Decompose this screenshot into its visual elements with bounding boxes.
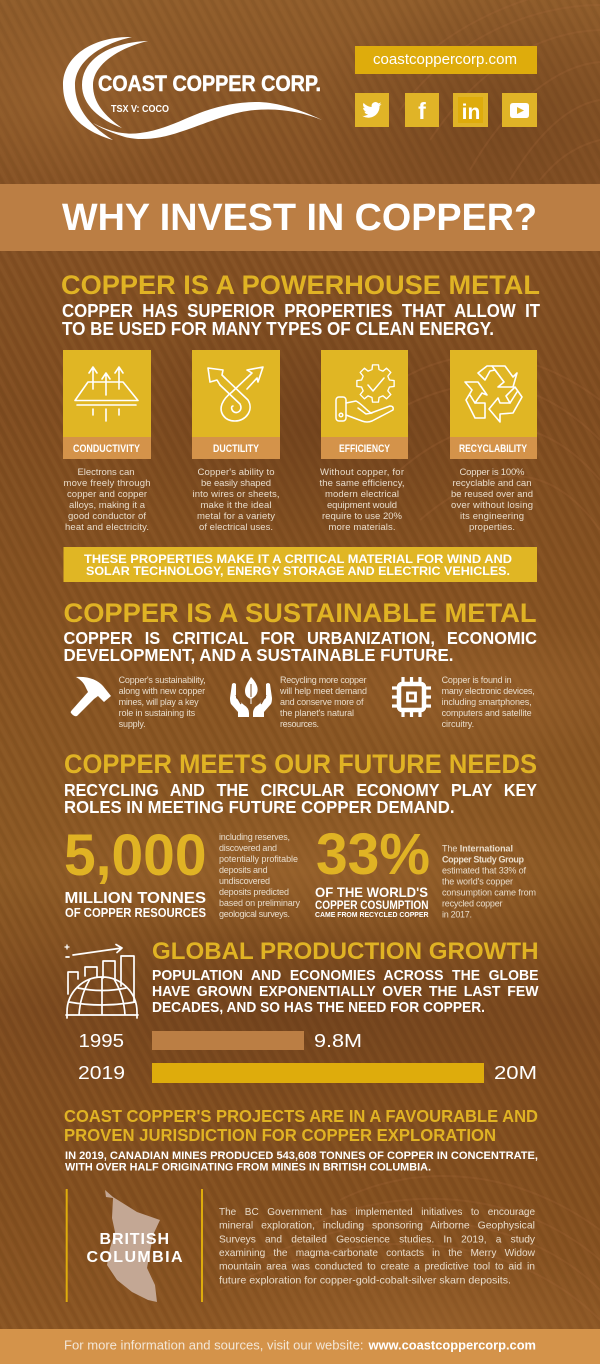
- text: recycling note: will help meet demand: [279, 686, 367, 696]
- map label: BRITISH: [100, 1231, 169, 1248]
- icon: facebook: f: [418, 98, 426, 124]
- text: resources note: based on preliminary: [219, 898, 300, 908]
- text: recycled note: recycled copper: [442, 898, 502, 908]
- text: recycled note: the world's copper: [442, 876, 513, 886]
- text: hammer note: Copper's sustainability,: [119, 675, 206, 685]
- logo crescents and swoosh: [63, 37, 322, 140]
- map label: [86, 1231, 183, 1266]
- text: recycled note: Copper Study Group: [442, 854, 524, 864]
- icon: global growth: [65, 944, 138, 1018]
- text: BC government: mountain area was conducted to create a predictive tool to aid in: [219, 1262, 535, 1273]
- heading: favourable jurisdiction: PROVEN JURISDICTION FOR COPPER EXPLORATION: [64, 1125, 496, 1145]
- icon: hands with leaf: [230, 677, 272, 717]
- panel: recyclability: [450, 350, 537, 459]
- subheading: Canadian mines: [65, 1150, 538, 1174]
- bar: 1995: [78, 1031, 362, 1051]
- text: recyclability: Copper is 100%: [460, 467, 525, 478]
- panel: British Columbia: [66, 1189, 203, 1302]
- bar: 1995: 9.8M: [314, 1031, 362, 1051]
- subheading: future needs: ROLES IN MEETING FUTURE COPPER DEMAND.: [64, 797, 454, 817]
- heading: future needs: COPPER MEETS OUR FUTURE NEEDS: [64, 749, 537, 779]
- text: recycling note: [279, 675, 367, 729]
- text: electronics note: many electronic devices,: [442, 686, 535, 696]
- callout banner: SOLAR TECHNOLOGY, ENERGY STORAGE AND ELECTRIC VEHICLES.: [86, 566, 510, 578]
- stat: 5,000: [64, 823, 206, 920]
- text: conductivity: move freely through: [64, 478, 150, 489]
- subheading: future needs: [64, 780, 537, 817]
- title band: WHY INVEST IN COPPER?: [62, 197, 537, 239]
- text: recycled note: The International: [442, 844, 513, 854]
- icon: linkedin: [453, 93, 488, 127]
- footer: [0, 1329, 600, 1364]
- panel: efficiency: [321, 350, 408, 459]
- text: recyclability: recyclable and can: [452, 478, 532, 489]
- text: ductility: metal for a variety: [197, 511, 275, 522]
- text: efficiency: require to use 20%: [322, 511, 403, 522]
- text: conductivity: heat and electricity.: [65, 522, 149, 533]
- footer: For more information and sources, visit our website:: [64, 1338, 364, 1352]
- heading: favourable jurisdiction: [64, 1106, 538, 1145]
- text: resources note: discovered and: [219, 843, 277, 853]
- heading: global production growth: GLOBAL PRODUCTION GROWTH: [152, 938, 538, 965]
- bar: 2019: [78, 1063, 537, 1083]
- title band: [0, 184, 600, 251]
- subheading: powerhouse metal: [62, 301, 540, 339]
- callout banner: [64, 547, 537, 582]
- label: conductivity: CONDUCTIVITY: [73, 443, 141, 455]
- text: electronics note: including smartphones,: [442, 697, 532, 707]
- heading: sustainable metal: COPPER IS A SUSTAINABLE METAL: [64, 598, 536, 628]
- logo: Coast Copper Corp: [63, 37, 322, 140]
- website button: coastcoppercorp.com: [373, 52, 517, 68]
- subheading: Canadian mines: IN 2019, CANADIAN MINES PRODUCED 543,608 TONNES OF COPPER IN CONCENTRATE,: [65, 1150, 538, 1162]
- stat: 33%: CAME FROM RECYCLED COPPER: [315, 910, 429, 919]
- text: hammer note: [119, 675, 206, 729]
- icon: efficiency: [336, 365, 394, 422]
- text: resources note: [219, 832, 300, 919]
- text: recycling note: the planet's natural: [280, 708, 354, 718]
- label: efficiency: EFFICIENCY: [339, 443, 391, 455]
- text: recyclability: its engineering: [460, 511, 524, 522]
- icon: ductility: [208, 367, 263, 421]
- icon: recycle: [465, 366, 522, 422]
- text: recycled note: [442, 844, 536, 920]
- text: electronics note: circuitry.: [442, 719, 474, 729]
- text: recyclability: properties.: [469, 522, 515, 533]
- text: hammer note: along with new copper: [119, 686, 205, 696]
- panel: ductility: [192, 350, 280, 459]
- text: recycling note: Recycling more copper: [280, 675, 366, 685]
- callout banner: THESE PROPERTIES MAKE IT A CRITICAL MATERIAL FOR WIND AND: [84, 554, 512, 566]
- stat: 5,000: 5,000: [64, 823, 206, 888]
- text: BC government: The BC Government has implemented initiatives to encourage: [219, 1207, 535, 1218]
- map label: COLUMBIA: [86, 1249, 183, 1266]
- text: ductility: make it the ideal: [200, 500, 272, 511]
- subheading: sustainable metal: COPPER IS CRITICAL FOR URBANIZATION, ECONOMIC: [64, 628, 537, 648]
- text: efficiency: equipment would: [327, 500, 397, 511]
- subheading: future needs: RECYCLING AND THE CIRCULAR ECONOMY PLAY KEY: [64, 780, 537, 800]
- heading: powerhouse metal: COPPER IS A POWERHOUSE METAL: [61, 270, 540, 300]
- subheading: Canadian mines: WITH OVER HALF ORIGINATING FROM MINES IN BRITISH COLUMBIA.: [65, 1162, 431, 1174]
- text: efficiency: Without copper, for: [320, 467, 404, 478]
- icon: linkedin: in: [462, 101, 480, 124]
- text: resources note: deposits and: [219, 865, 268, 875]
- text: BC government: Surveys and detailed Geoscience studies. In 2019, a study: [219, 1234, 536, 1245]
- text: efficiency: modern electrical: [325, 489, 399, 500]
- icon: youtube: [502, 93, 537, 127]
- text: conductivity: alloys, making it a: [69, 500, 146, 511]
- panel: conductivity: [63, 350, 151, 459]
- map: British Columbia: [105, 1190, 160, 1302]
- label: ductility: DUCTILITY: [213, 443, 260, 455]
- text: efficiency: the same efficiency,: [320, 478, 404, 489]
- website button: [355, 46, 537, 74]
- bar: 1995: 1995: [78, 1031, 124, 1051]
- text: recyclability: [451, 467, 533, 533]
- text: ductility: be easily shaped: [201, 478, 271, 489]
- text: resources note: undiscovered: [219, 876, 270, 886]
- label: recyclability: RECYCLABILITY: [459, 443, 528, 455]
- text: electronics note: [442, 675, 535, 729]
- text: conductivity: [64, 467, 150, 533]
- text: ductility: [192, 467, 280, 533]
- text: electronics note: computers and satellite: [442, 708, 532, 718]
- text: BC government: mineral exploration, including sponsoring Airborne Geophysical: [219, 1221, 535, 1232]
- stat: 5,000: MILLION TONNES: [64, 890, 206, 907]
- icon: hammer: [71, 677, 111, 716]
- icon: twitter: [355, 93, 389, 127]
- footer: www.coastcoppercorp.com: [368, 1338, 536, 1352]
- icon: conductivity: [75, 367, 138, 421]
- text: recycling note: resources.: [280, 719, 319, 729]
- text: ductility: into wires or sheets,: [192, 489, 280, 500]
- subheading: sustainable metal: [64, 628, 537, 665]
- subheading: powerhouse metal: COPPER HAS SUPERIOR PROPERTIES THAT ALLOW IT: [62, 301, 540, 321]
- icon: facebook: [405, 93, 439, 127]
- text: BC government: examining the magma-carbonate contacts in the Merry Widow: [219, 1248, 535, 1259]
- text: recyclability: over without losing: [451, 500, 533, 511]
- logo name: COAST COPPER CORP.: [98, 71, 321, 96]
- stat: 33%: [315, 822, 430, 919]
- bar: 2019: 2019: [78, 1063, 125, 1083]
- stat: 33%: COPPER COSUMPTION: [315, 900, 428, 912]
- text: conductivity: Electrons can: [78, 467, 134, 478]
- subheading: global production growth: POPULATION AND ECONOMIES ACROSS THE GLOBE: [152, 967, 538, 984]
- text: recycled note: estimated that 33% of: [442, 866, 526, 876]
- text: hammer note: supply.: [119, 719, 146, 729]
- text: resources note: deposits predicted: [219, 887, 289, 897]
- text: hammer note: role in sustaining its: [119, 708, 196, 718]
- bar: 2019: 20M: [494, 1063, 537, 1083]
- stat: 33%: OF THE WORLD'S: [315, 884, 428, 900]
- text: efficiency: [320, 467, 404, 533]
- text: recycling note: and conserve more of: [280, 697, 364, 707]
- text: recycled note: consumption came from: [442, 888, 536, 898]
- bar chart: [78, 1031, 537, 1083]
- text: hammer note: mines, will play a key: [119, 697, 199, 707]
- text: recyclability: be reused over and: [451, 489, 533, 500]
- stat: 33%: 33%: [316, 822, 430, 887]
- text: ductility: of electrical uses.: [199, 522, 273, 533]
- subheading: global production growth: DECADES, AND SO HAS THE NEED FOR COPPER.: [152, 999, 485, 1016]
- text: resources note: potentially profitable: [219, 854, 298, 864]
- icon: microchip: [392, 677, 431, 717]
- text: BC government: [219, 1207, 536, 1286]
- text: electronics note: Copper is found in: [442, 675, 512, 685]
- text: resources note: geological surveys.: [219, 909, 290, 919]
- subheading: sustainable metal: DEVELOPMENT, AND A SUSTAINABLE FUTURE.: [64, 645, 454, 665]
- stat: 5,000: OF COPPER RESOURCES: [65, 905, 206, 920]
- text: conductivity: copper and copper: [67, 489, 147, 500]
- text: efficiency: more materials.: [328, 522, 396, 533]
- heading: favourable jurisdiction: COAST COPPER'S PROJECTS ARE IN A FAVOURABLE AND: [64, 1106, 538, 1126]
- text: BC government: future exploration for copper-gold-cobalt-silver skarn deposits.: [219, 1275, 511, 1286]
- subheading: global production growth: [152, 967, 539, 1016]
- logo ticker: TSX V: COCO: [111, 103, 169, 115]
- text: recycled note: in 2017.: [442, 910, 472, 920]
- text: conductivity: good conductor of: [68, 511, 146, 522]
- text: ductility: Copper's ability to: [198, 467, 274, 478]
- subheading: powerhouse metal: TO BE USED FOR MANY TYPES OF CLEAN ENERGY.: [62, 319, 494, 339]
- text: resources note: including reserves,: [219, 832, 290, 842]
- subheading: global production growth: HAVE GROWN EXPONENTIALLY OVER THE LAST FEW: [152, 983, 539, 1000]
- social icons: [355, 93, 537, 127]
